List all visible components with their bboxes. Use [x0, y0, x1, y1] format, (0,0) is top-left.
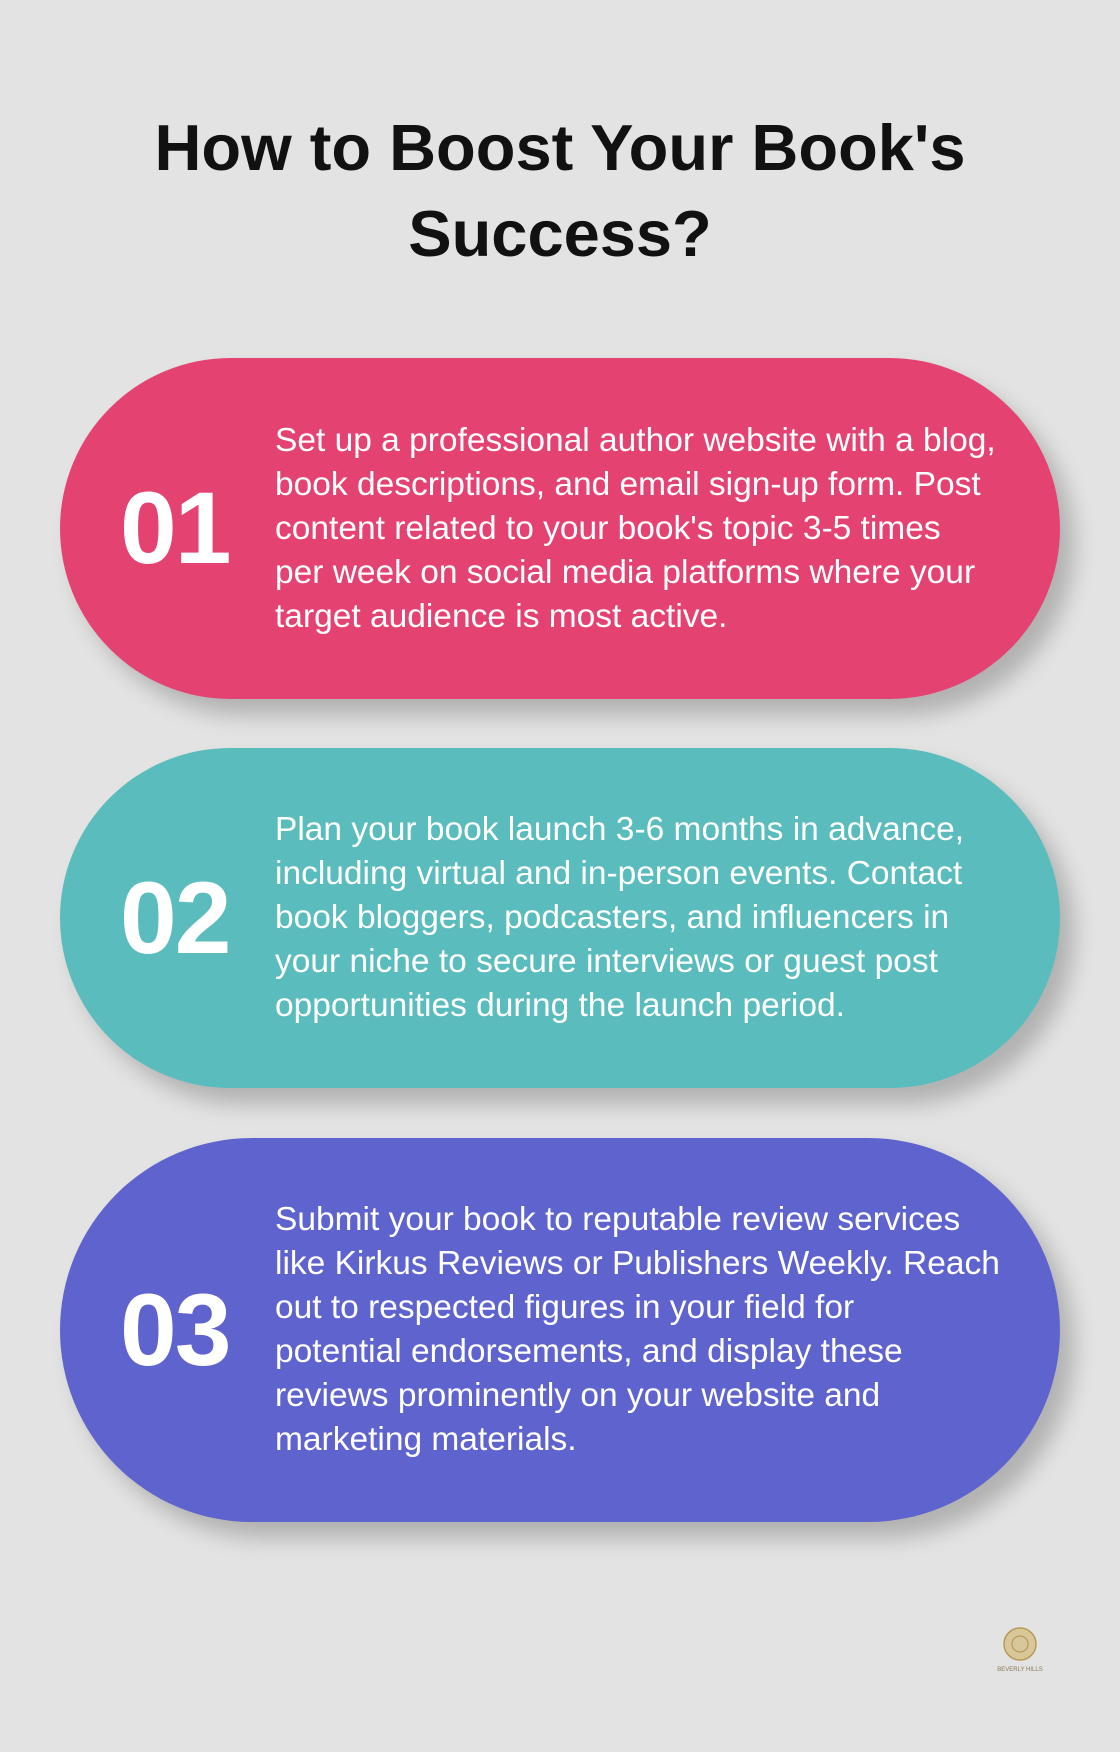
title: How to Boost Your Book's [154, 111, 966, 184]
text step 02: book bloggers, podcasters, and influencers in [275, 899, 949, 936]
text step 03: reviews prominently on your website and [275, 1377, 880, 1414]
text step 03: potential endorsements, and display these [275, 1333, 903, 1370]
text step 03: Submit your book to reputable review services [275, 1201, 960, 1238]
text step 01: per week on social media platforms where your [275, 554, 975, 590]
text step 03 [275, 1201, 1000, 1458]
text step 03: like Kirkus Reviews or Publishers Weekly. Reach [275, 1245, 1000, 1282]
logo [997, 1627, 1043, 1673]
number 03: 03 [120, 1272, 229, 1386]
text step 02: Plan your book launch 3-6 months in advance, [275, 811, 964, 848]
title: Success? [408, 197, 712, 270]
text step 01: book descriptions, and email sign-up form. Post [275, 466, 981, 502]
text step 01 [275, 422, 996, 634]
text step 02 [275, 811, 964, 1024]
panel: step 01 [60, 358, 1060, 699]
title [154, 111, 966, 270]
text step 02: including virtual and in-person events. Contact [275, 855, 962, 892]
text step 02: your niche to secure interviews or guest post [275, 943, 938, 980]
number 01: 01 [120, 471, 229, 585]
text step 02: opportunities during the launch period. [275, 987, 845, 1024]
text step 01: content related to your book's topic 3-5 times [275, 510, 941, 546]
panel: step 03 [60, 1138, 1060, 1522]
text step 01: Set up a professional author website with a blog, [275, 422, 996, 458]
text step 03: out to respected figures in your field for [275, 1289, 854, 1326]
number 02: 02 [120, 860, 229, 974]
panel: step 02 [60, 748, 1060, 1088]
text step 01: target audience is most active. [275, 598, 727, 634]
text step 03: marketing materials. [275, 1421, 577, 1458]
logo: BEVERLY HILLS [997, 1667, 1043, 1673]
